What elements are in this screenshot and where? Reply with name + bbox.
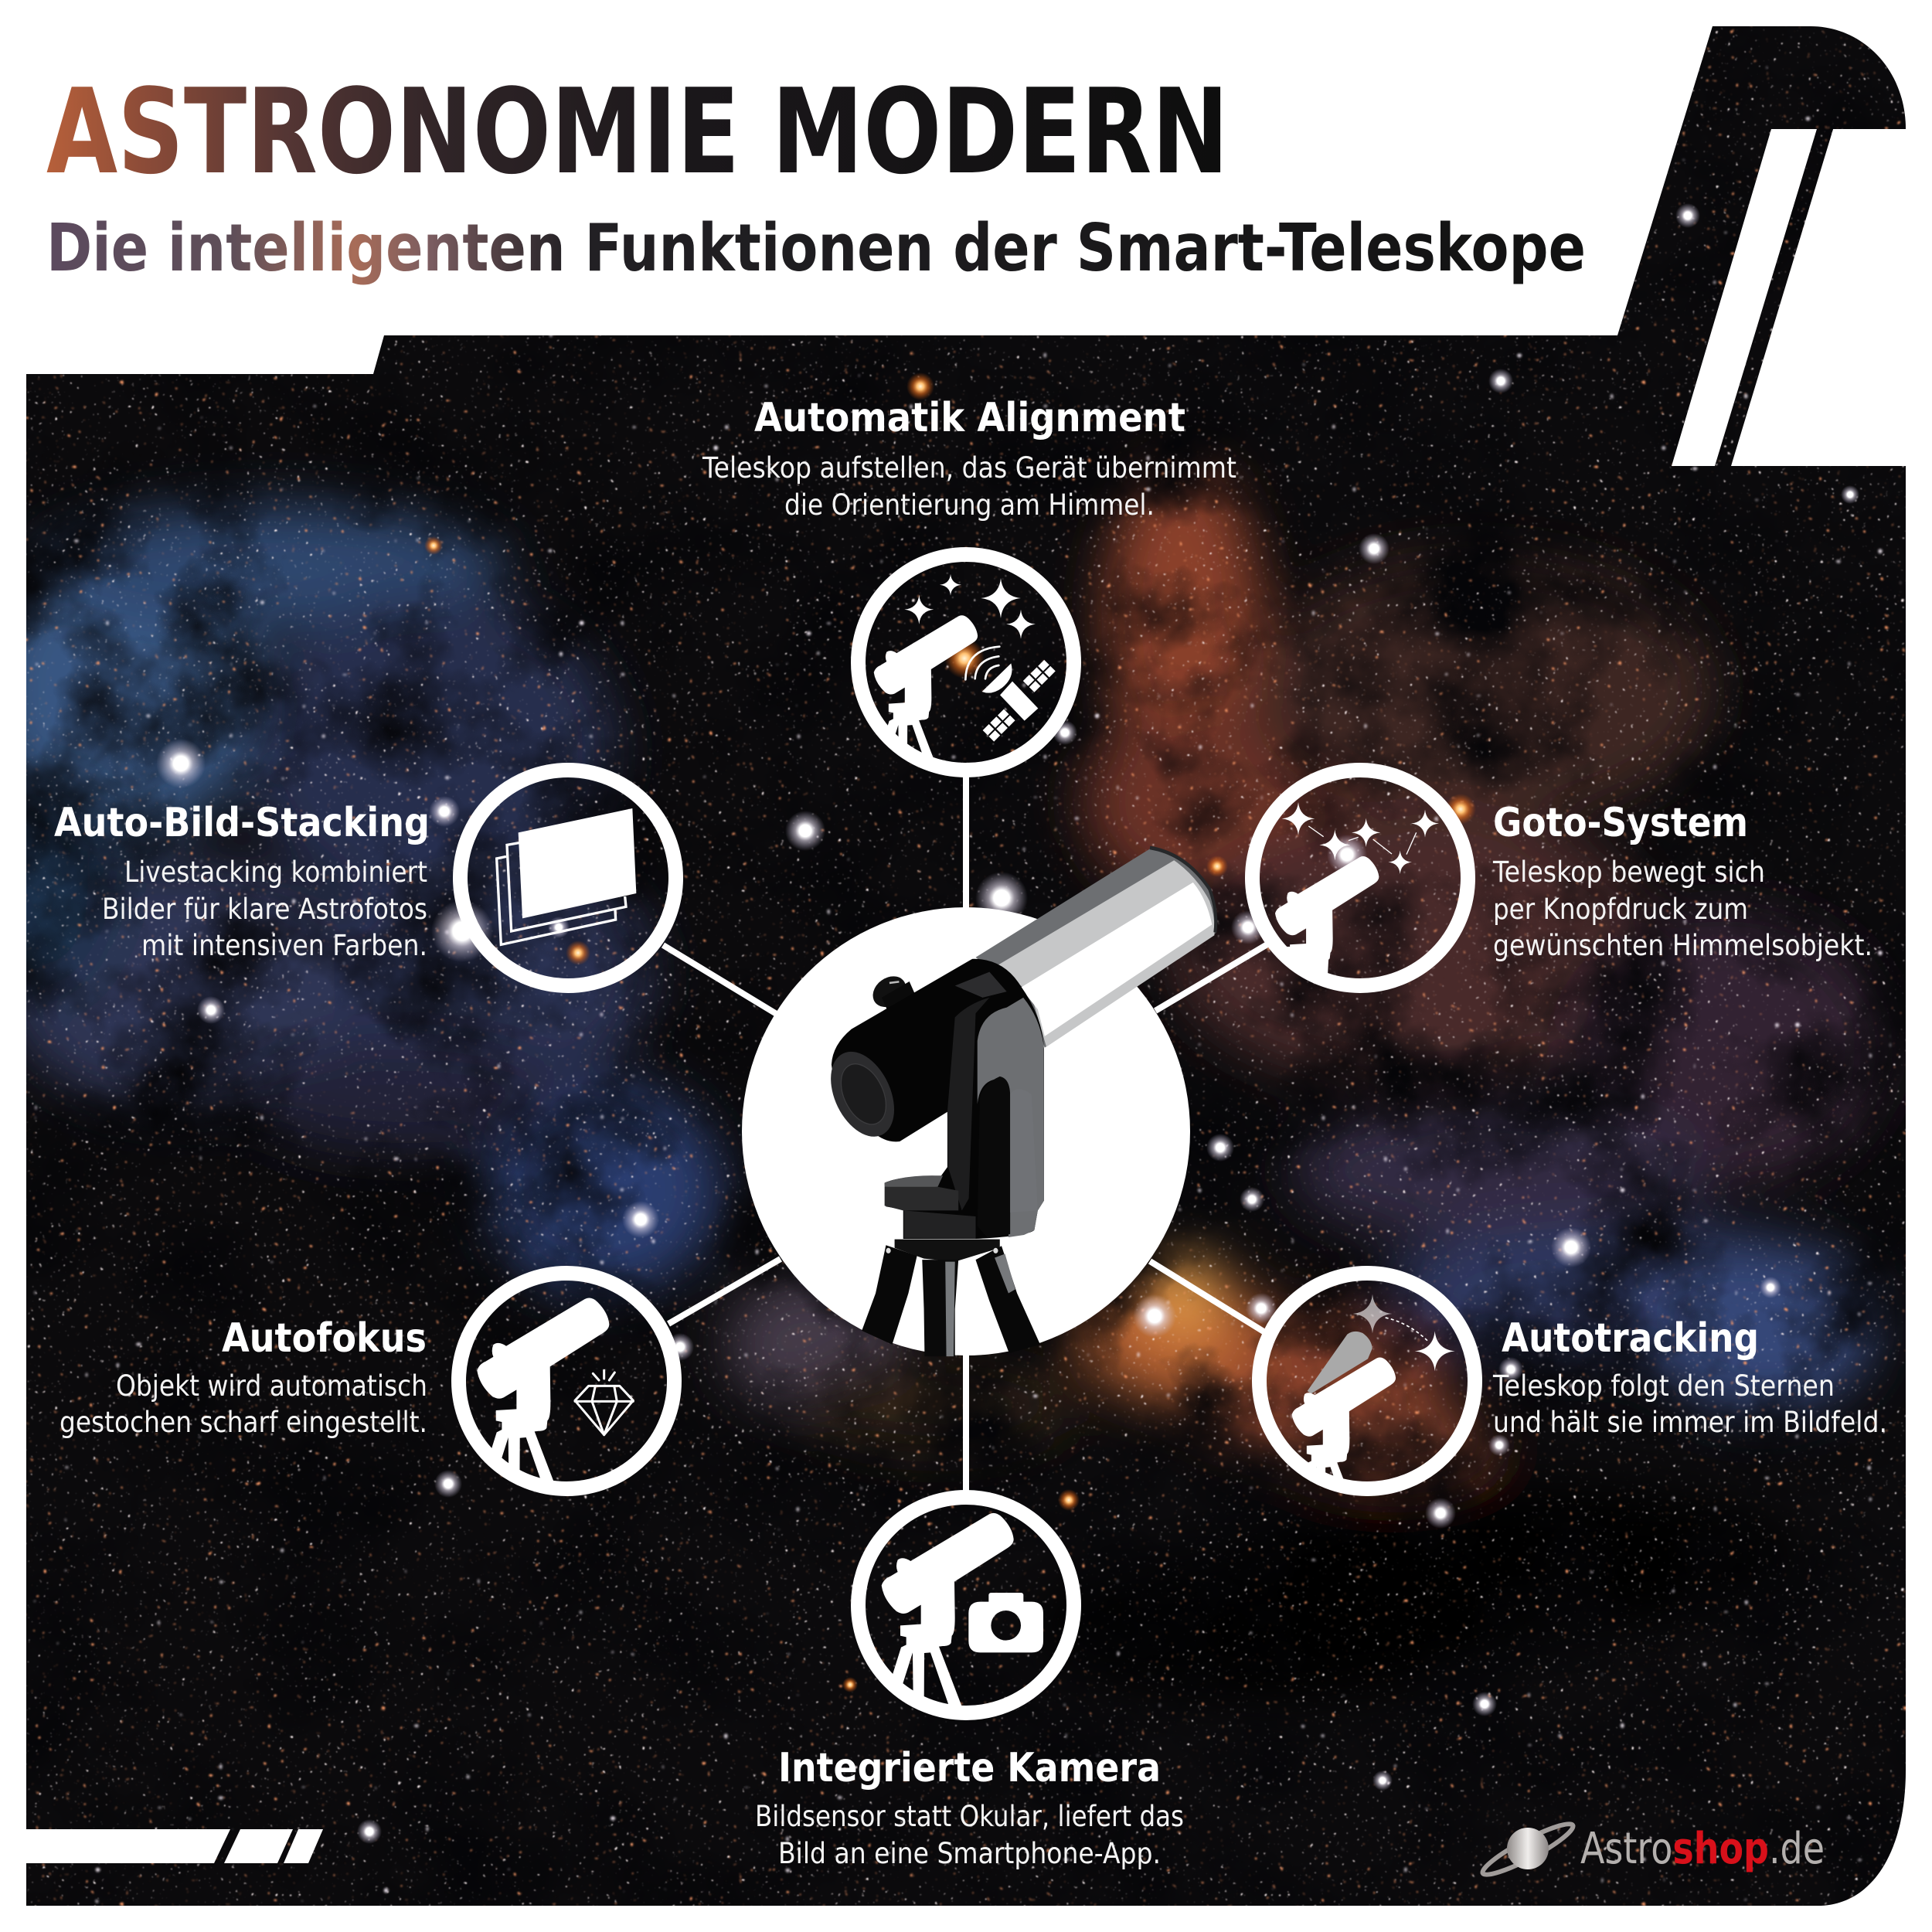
text block: Auto-Bild-Stacking (54, 800, 430, 962)
text block: Auto-Bild-Stacking: Livestacking kombiniert (124, 855, 427, 889)
tube (976, 848, 1216, 1048)
text block: Goto-System: Teleskop bewegt sich (1492, 855, 1765, 889)
text block: Integrierte Kamera: Bildsensor statt Okular, liefert das (755, 1800, 1184, 1833)
feature ring: Goto-System (1252, 770, 1468, 1012)
icon: constellation (1282, 802, 1439, 874)
text block: Integrierte Kamera: Integrierte Kamera (778, 1745, 1161, 1791)
icon: camera (968, 1593, 1043, 1652)
subtitle: Die intelligenten Funktionen der Smart-Teleskope (46, 210, 1586, 287)
icon: telescope (477, 1298, 609, 1495)
tube body and fork (832, 959, 1044, 1239)
central white disc (742, 907, 1190, 1355)
text block: Goto-System (1492, 800, 1872, 962)
base plate (885, 1175, 976, 1239)
text block: Goto-System: Goto-System (1493, 800, 1748, 846)
central telescope illustration (818, 848, 1216, 1356)
bright stars (156, 203, 1859, 1844)
icon: telescope (1275, 856, 1379, 1012)
text block: Auto-Bild-Stacking: Bilder für klare Astrofotos (102, 893, 427, 926)
text block: Goto-System: per Knopfdruck zum (1493, 893, 1748, 926)
text block: Autotracking: Autotracking (1502, 1315, 1759, 1362)
feature ring: Auto-Bild-Stacking (461, 770, 675, 986)
icon: satellite (965, 647, 1056, 742)
connector lines (663, 773, 1275, 1495)
icon: stars (904, 574, 1036, 639)
text block: Integrierte Kamera (755, 1745, 1184, 1870)
icon: tracked stars (1353, 1294, 1455, 1371)
text block: Autotracking: und hält sie immer im Bildfeld. (1493, 1406, 1887, 1439)
tripod (862, 1240, 1040, 1356)
icon: stacked images (497, 808, 636, 944)
feature ring: Autofokus (459, 1274, 674, 1495)
icon: telescope (874, 615, 978, 770)
lens (818, 1039, 907, 1150)
logo: Astroshop.de (1478, 1817, 1825, 1882)
text block: Autotracking (1492, 1315, 1887, 1439)
feature ring: Autotracking (1260, 1274, 1475, 1512)
text block: Auto-Bild-Stacking: mit intensiven Farben. (141, 929, 427, 962)
text block: Autofokus (60, 1315, 427, 1439)
decorative bottom-left bar (26, 1829, 323, 1863)
title: ASTRONOMIE MODERN (46, 63, 1229, 200)
icon: diamond (575, 1370, 633, 1435)
icon: telescope (882, 1513, 1014, 1710)
icon: moved telescope ghost (1308, 1332, 1372, 1393)
text block: Auto-Bild-Stacking: Auto-Bild-Stacking (54, 800, 430, 846)
text block: Goto-System: gewünschten Himmelsobjekt. (1493, 929, 1872, 962)
text block: Autofokus: gestochen scharf eingestellt. (60, 1406, 427, 1439)
text block: Autofokus: Autofokus (222, 1315, 427, 1362)
fork inner panel (978, 1077, 1010, 1238)
feature ring: Integrierte Kamera (858, 1498, 1074, 1713)
text block: Automatik Alignment (702, 395, 1236, 522)
text block: Integrierte Kamera: Bild an eine Smartphone-App. (778, 1837, 1161, 1870)
logo: Astroshop.de: Astroshop.de (1580, 1824, 1825, 1874)
icon: saturn (1478, 1817, 1577, 1882)
icon: telescope (1292, 1357, 1396, 1512)
knob (869, 971, 916, 1013)
feature ring: Automatik Alignment (858, 555, 1074, 770)
text block: Automatik Alignment: die Orientierung am Himmel. (784, 488, 1155, 522)
fork highlight (978, 998, 1044, 1237)
text block: Automatik Alignment: Automatik Alignment (754, 395, 1185, 441)
text block: Autofokus: Objekt wird automatisch (116, 1369, 427, 1403)
text block: Automatik Alignment: Teleskop aufstellen, das Gerät übernimmt (702, 451, 1236, 485)
text block: Autotracking: Teleskop folgt den Sternen (1492, 1369, 1835, 1403)
